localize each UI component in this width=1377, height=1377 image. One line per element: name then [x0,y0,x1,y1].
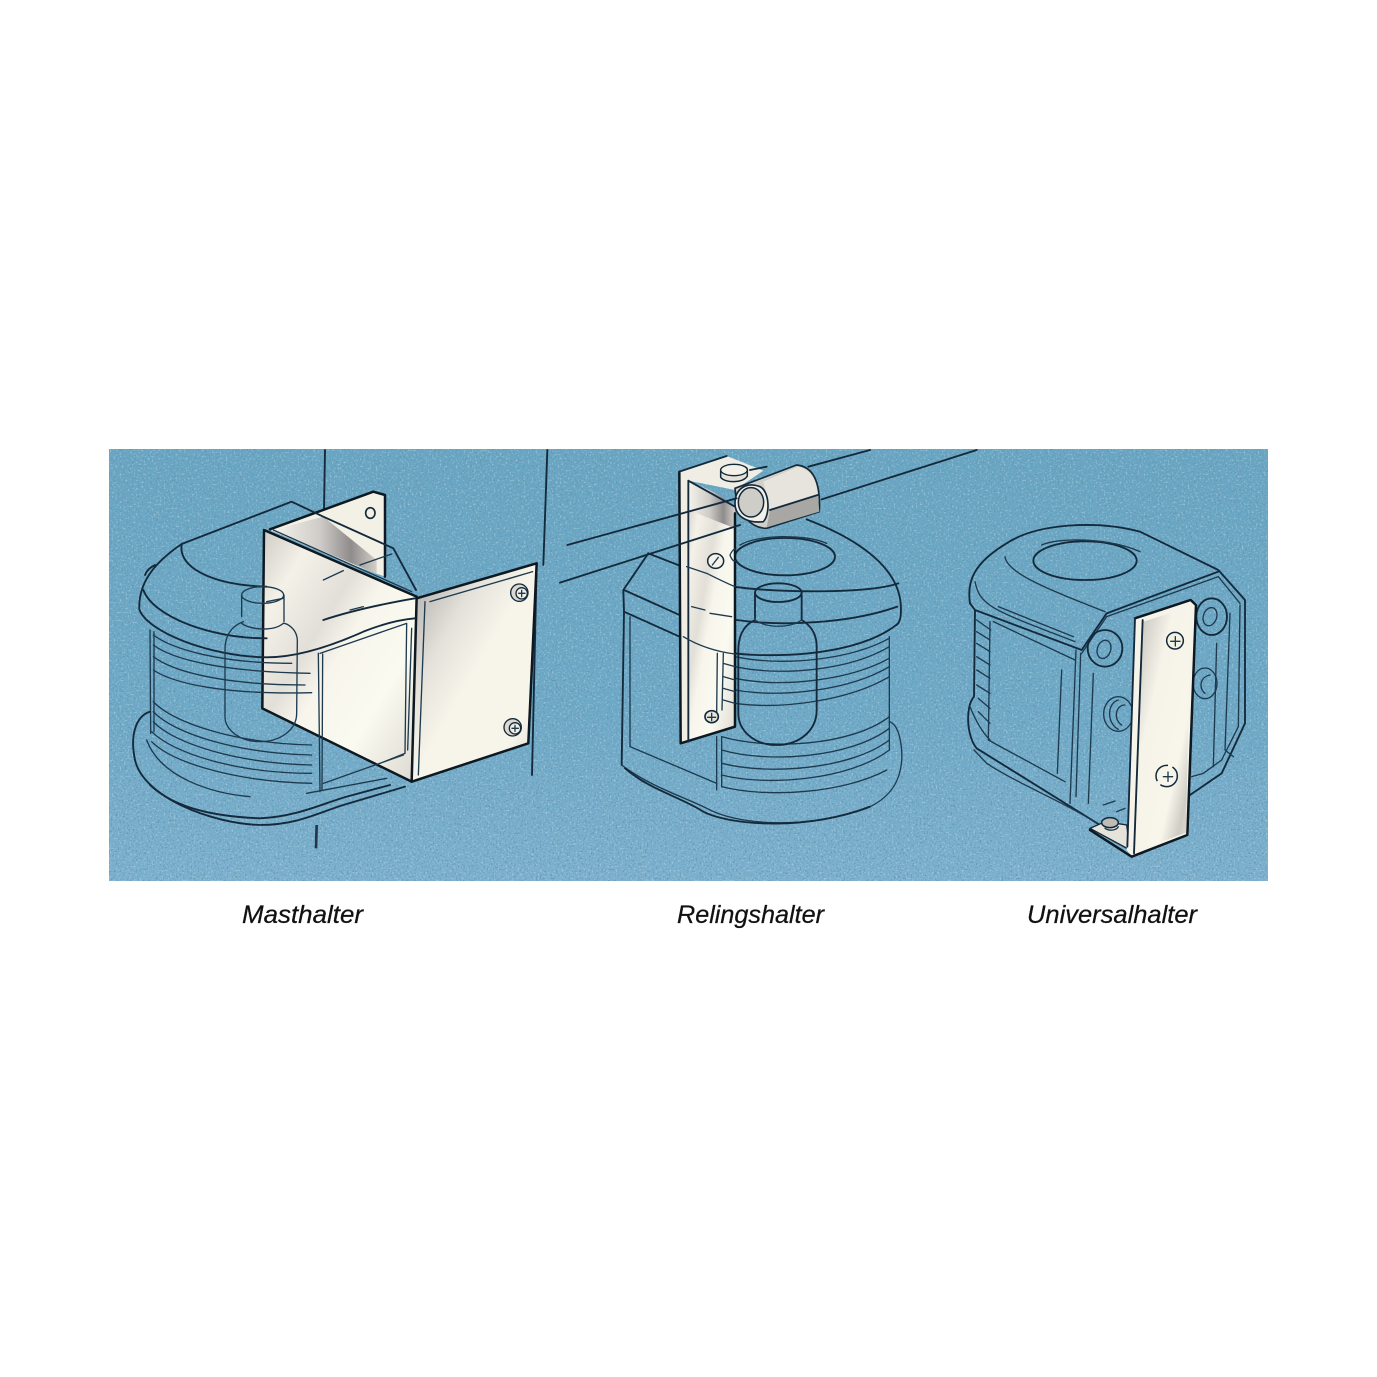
rail lines [560,450,977,583]
metal strap [1090,600,1197,857]
illustration: mast bracket on lantern [133,450,547,848]
bulb [225,587,297,742]
bulb [738,583,817,745]
lantern body [622,519,902,824]
rail clamp [735,465,819,528]
bracket strap [679,456,767,743]
caption: Relingshalter: Relingshalter [677,901,826,929]
lantern front [968,600,1245,825]
illustration: rail bracket on lantern [560,450,977,824]
lantern base [133,712,405,825]
mounting bosses [1088,598,1227,731]
mast lines [316,450,547,848]
illustration panel: blue speckled background [109,449,1268,881]
lens ribs [152,635,312,783]
metal bracket [262,492,537,782]
lantern body outline [139,502,416,792]
caption: Universalhalter: Universalhalter [1027,901,1199,929]
lens ribs [722,638,889,793]
screws [504,584,528,736]
illustration: universal bracket on lantern [968,525,1245,857]
bolt [721,464,747,482]
lantern top [969,525,1245,653]
caption: Masthalter: Masthalter [242,901,365,929]
